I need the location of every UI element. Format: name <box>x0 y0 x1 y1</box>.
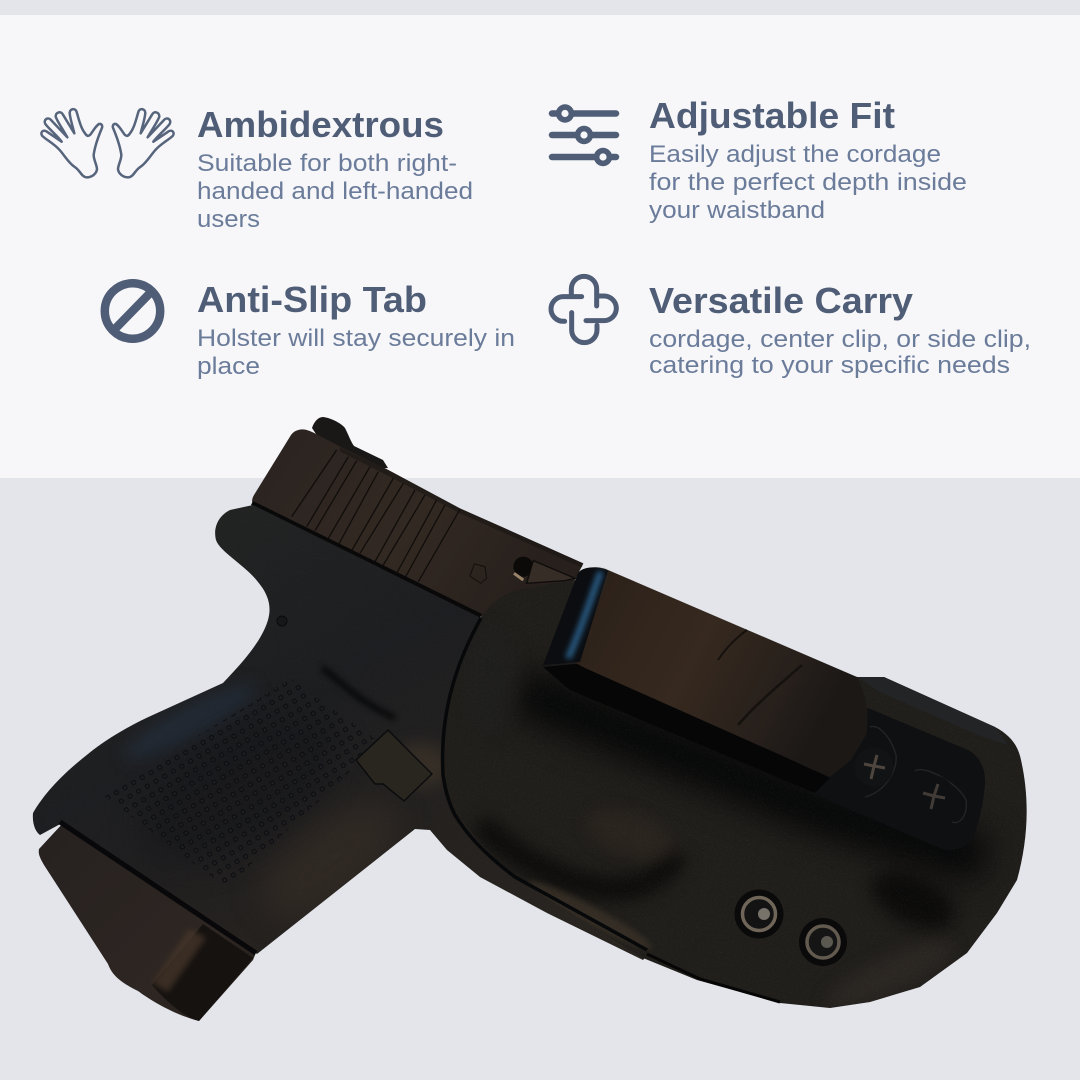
pistol frame and grip <box>32 505 644 960</box>
heading: Adjustable Fit: Adjustable Fit <box>649 95 895 136</box>
belt clip <box>543 567 868 793</box>
pistol slide <box>252 429 583 617</box>
text: Versatile Carry description <box>649 326 1031 379</box>
text: Anti-Slip Tab description: place <box>197 353 260 380</box>
text: Anti-Slip Tab description <box>197 325 515 380</box>
text: Anti-Slip Tab description: Holster will stay securely in <box>197 325 515 352</box>
text: Adjustable Fit description: Easily adjust the cordage <box>649 141 941 168</box>
text: Ambidextrous description <box>197 150 473 233</box>
product photo: pistol in holster <box>30 417 1040 1021</box>
slide-to-frame seam <box>252 503 481 616</box>
icon: two open hands <box>41 109 174 177</box>
holster upper wing <box>857 677 1008 745</box>
text: Versatile Carry description: catering to your specific needs <box>649 352 1010 379</box>
text: Adjustable Fit description: your waistband <box>649 197 825 224</box>
icon: prohibition sign <box>105 283 160 339</box>
icon: interlocking cross <box>551 276 616 343</box>
holster shell <box>440 575 1040 1021</box>
heading: Versatile Carry: Versatile Carry <box>649 280 913 321</box>
text: Ambidextrous description: users <box>197 206 260 233</box>
rivet: left <box>734 890 784 938</box>
heading: Anti-Slip Tab: Anti-Slip Tab <box>197 279 427 320</box>
text: Ambidextrous description: Suitable for both right- <box>197 150 457 177</box>
screw: upper left <box>854 748 894 786</box>
feature: Ambidextrous <box>41 104 473 233</box>
screw: upper right <box>914 776 954 816</box>
panel: features background <box>0 15 1080 478</box>
text: Adjustable Fit description <box>649 141 967 224</box>
feature: Anti-Slip Tab <box>105 279 515 380</box>
grip stippling <box>103 679 375 888</box>
rivet: right <box>799 918 847 966</box>
heading: Ambidextrous: Ambidextrous <box>197 104 444 145</box>
magazine base plate <box>39 822 257 1021</box>
icon: sliders <box>552 104 616 166</box>
text: Versatile Carry description: cordage, center clip, or side clip, <box>649 326 1031 353</box>
rear sight <box>312 417 388 470</box>
text: Adjustable Fit description: for the perfect depth inside <box>649 169 967 196</box>
mounting plate with screws <box>810 708 985 850</box>
frame notch <box>356 730 432 801</box>
text: Ambidextrous description: handed and left-handed <box>197 178 473 205</box>
feature: Adjustable Fit <box>552 95 967 224</box>
feature: Versatile Carry <box>551 276 1031 379</box>
